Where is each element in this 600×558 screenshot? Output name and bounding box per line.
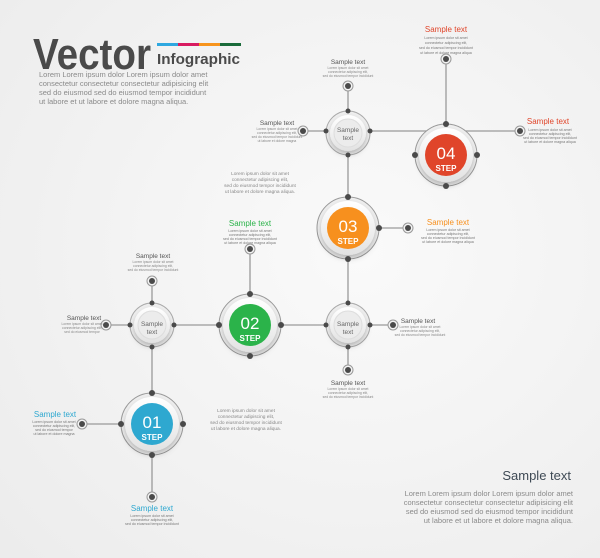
connector lines [82,59,520,497]
label: step 01 left: Sample text [34,410,77,419]
label: top small node: sed do eiusmod tempor incididunt [323,74,373,78]
title [33,30,241,79]
label: step 01 left: sed do eiusmod tempor [35,428,74,432]
intro text [39,70,209,106]
bottom right text block [404,468,574,525]
paragraph: lower middle: Lorem ipsum dolor sit amet [217,408,276,414]
label: right small node right: Sample text [401,318,435,325]
paragraph: lower middle: ut labore et dolore magna aliqua. [211,426,281,432]
step 02 [216,291,284,359]
title: Vector [33,30,151,79]
intro text: sed do eiusmod sed do eiusmod tempor incididunt [39,88,207,97]
label: right small node right [395,318,445,337]
label: right small node bottom [323,380,373,399]
label: step 01 left: ut labore et dolore magna [34,432,74,436]
label: top small node left: connectetur adipiscing elit, [257,131,297,135]
label: step 04 top: ut labore et dolore magna aliqua [420,51,472,55]
label: step 04 right: ut labore et dolore magna aliqua [524,140,576,144]
step 03: 03 [339,217,357,236]
paragraph: middle: sed do eiusmod tempor incididunt [224,183,297,189]
label: left small node left [62,315,102,334]
label: top small node: Sample text [331,59,365,66]
label: right small node bottom: Sample text [331,380,365,387]
small node: left [128,300,176,350]
bottom right text block: consectetur consectetur consectetur adipisicing elit [404,498,574,507]
paragraph: middle: Lorem ipsum dolor sit amet [231,171,290,177]
small node: right: text [343,329,353,336]
label: left small node top: Lorem ipsum dolor sit amet [133,260,173,264]
step 01 [118,390,186,458]
label: step 04 top: Sample text [425,25,468,34]
step 01: STEP [142,433,163,442]
label: step 01 bottom: Lorem ipsum dolor sit amet [130,514,174,518]
paragraph: middle [224,171,297,195]
bottom right text block: sed do eiusmod sed do eiusmod tempor incididunt [406,507,574,516]
small node: left: text [147,329,157,336]
bottom right text block: Lorem Lorem ipsum dolor Lorem ipsum dolor amet [405,489,574,498]
label: step 01 bottom: connectetur adipiscing elit, [131,518,173,522]
step 02: 02 [241,314,259,333]
step 04: 04 [437,144,455,163]
label: step 04 top: Lorem ipsum dolor sit amet [424,36,468,40]
label: left small node left: Sample text [67,315,101,322]
small node: top [324,108,372,158]
label: left small node top: Sample text [136,253,170,260]
intro text: consectetur consectetur consectetur adipisicing elit [39,79,209,88]
label: right small node right: connectetur adipiscing elit, [400,329,440,333]
label: top small node [323,59,373,78]
small node: right [324,300,372,350]
label: top small node left: Sample text [260,120,294,127]
label: step 02 top: ut labore et dolore magna aliqua [224,241,276,245]
label: step 01 bottom [125,504,179,526]
label: top small node left: ut labore et dolore magna [258,139,296,143]
label: step 04 right: sed do eiusmod tempor incididunt [523,136,577,140]
small node: right: Sample [337,321,359,328]
label: step 02 top [223,219,277,245]
label: right small node bottom: sed do eiusmod tempor incididunt [323,395,373,399]
label: step 04 top [419,25,473,55]
step 04 [412,121,480,189]
label: step 03 right: Lorem ipsum dolor sit amet [426,228,470,232]
label: step 04 right: Lorem ipsum dolor sit amet [528,128,572,132]
terminal dots [77,54,525,502]
label: left small node left: Lorem ipsum dolor sit amet [62,322,102,326]
intro text: Lorem Lorem ipsum dolor Lorem ipsum dolor amet [39,70,208,79]
label: step 02 top: Lorem ipsum dolor sit amet [228,229,272,233]
label: left small node top: sed do eiusmod tempor incididunt [128,268,178,272]
bottom right text block: ut labore et ut labore et dolore magna aliqua. [424,516,573,525]
label: top small node: connectetur adipiscing elit, [328,70,368,74]
label: step 04 right [523,117,577,144]
label: step 01 bottom: sed do eiusmod tempor incididunt [125,522,179,526]
small node: top: Sample [337,127,359,134]
title: Infographic [157,51,240,68]
label: step 03 right: Sample text [427,218,470,227]
label: right small node right: sed do eiusmod tempor incididunt [395,333,445,337]
label: right small node bottom: connectetur adipiscing elit, [328,391,368,395]
label: step 02 top: sed do eiusmod tempor incididunt [223,237,277,241]
label: step 02 top: Sample text [229,219,272,228]
paragraph: lower middle: sed do eiusmod tempor incididunt [210,420,283,426]
step 04: STEP [436,164,457,173]
label: top small node left: Lorem ipsum dolor sit amet [257,127,297,131]
label: right small node right: Lorem ipsum dolor sit amet [400,325,440,329]
small node: left: Sample [141,321,163,328]
label: step 03 right: connectetur adipiscing elit, [427,232,469,236]
step 01: 01 [143,413,161,432]
label: step 01 bottom: Sample text [131,504,174,513]
step 02: STEP [240,334,261,343]
label: step 02 top: connectetur adipiscing elit, [229,233,271,237]
label: step 03 right: ut labore et dolore magna aliqua [422,240,474,244]
label: step 04 top: sed do eiusmod tempor incididunt [419,46,473,50]
intro text: ut labore et ut labore et dolore magna aliqua. [39,97,188,106]
label: step 01 left: connectetur adipiscing elit, [33,424,75,428]
label: step 01 left: Lorem ipsum dolor sit amet [32,420,76,424]
label: left small node top: connectetur adipiscing elit, [133,264,173,268]
paragraph: lower middle [210,408,283,432]
label: step 04 top: connectetur adipiscing elit, [425,41,467,45]
small node: top: text [343,135,353,142]
label: step 03 right: sed do eiusmod tempor incididunt [421,236,475,240]
label: step 01 left [32,410,77,436]
label: left small node left: connectetur adipiscing elit, [62,326,102,330]
step 03 [317,194,382,262]
paragraph: middle: ut labore et dolore magna aliqua. [225,189,295,195]
label: left small node left: sed do eiusmod tempor [64,330,101,334]
label: top small node left [252,120,302,143]
step 03: STEP [338,237,359,246]
label: top small node left: sed do eiusmod tempor incididunt [252,135,302,139]
label: step 04 right: connectetur adipiscing elit, [529,132,571,136]
paragraph: middle: connectetur adipiscing elit, [232,177,288,183]
label: right small node bottom: Lorem ipsum dolor sit amet [328,387,368,391]
bottom right text block: Sample text [502,468,571,483]
label: left small node top [128,253,178,272]
label: step 04 right: Sample text [527,117,570,126]
label: top small node: Lorem ipsum dolor sit amet [328,66,368,70]
label: step 03 right [421,218,475,244]
paragraph: lower middle: connectetur adipiscing elit, [218,414,274,420]
